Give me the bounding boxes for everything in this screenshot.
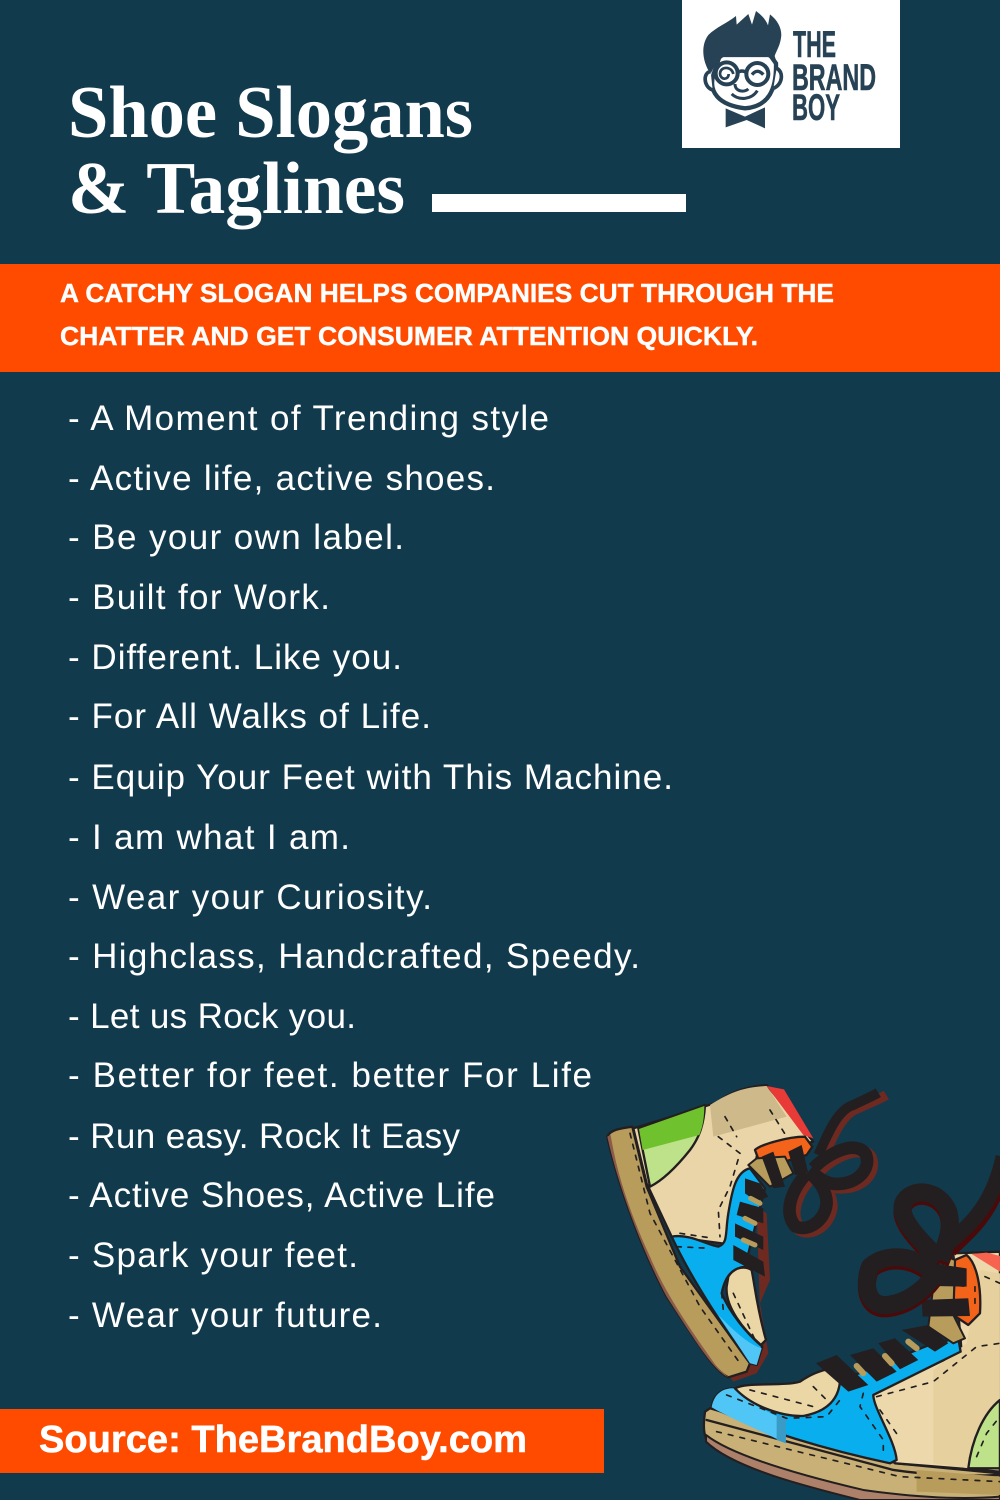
left sneaker xyxy=(607,1085,813,1382)
slogan list: - Active life, active shoes. xyxy=(68,459,495,498)
slogan list: - Spark your feet. xyxy=(68,1236,358,1275)
title xyxy=(68,72,473,230)
orange banner: A CATCHY SLOGAN HELPS COMPANIES CUT THROUGH THE xyxy=(60,278,834,308)
slogan list: - For All Walks of Life. xyxy=(68,697,431,736)
source footer: Source: TheBrandBoy.com xyxy=(39,1419,527,1461)
right sneaker laces xyxy=(867,1157,1000,1308)
slogan list: - I am what I am. xyxy=(68,818,350,857)
orange banner: CHATTER AND GET CONSUMER ATTENTION QUICKLY. xyxy=(60,321,758,351)
slogan list: - Let us Rock you. xyxy=(68,997,356,1036)
slogan list: - A Moment of Trending style xyxy=(68,399,549,438)
logo wordmark: THE xyxy=(793,24,836,65)
title underline bar xyxy=(432,194,686,212)
slogan list: - Built for Work. xyxy=(68,578,330,617)
left sneaker laces xyxy=(789,1093,886,1231)
title: Shoe Slogans xyxy=(68,72,473,154)
slogan list: - Wear your Curiosity. xyxy=(68,878,432,917)
slogan list: - Different. Like you. xyxy=(68,638,402,677)
icon: boy with glasses xyxy=(703,11,781,128)
illustration: pair of sneakers xyxy=(607,1085,1000,1500)
title: & Taglines xyxy=(68,148,405,230)
source footer xyxy=(0,1409,604,1473)
slogan list: - Active Shoes, Active Life xyxy=(68,1176,495,1215)
logo: The Brand Boy xyxy=(682,0,900,148)
slogan list xyxy=(68,399,673,1335)
slogan list: - Wear your future. xyxy=(68,1296,382,1335)
slogan list: - Better for feet. better For Life xyxy=(68,1056,592,1095)
orange banner xyxy=(0,264,1000,372)
logo wordmark: BOY xyxy=(792,87,840,128)
slogan list: - Equip Your Feet with This Machine. xyxy=(68,758,673,797)
slogan list: - Run easy. Rock It Easy xyxy=(68,1117,460,1156)
slogan list: - Be your own label. xyxy=(68,518,404,557)
slogan list: - Highclass, Handcrafted, Speedy. xyxy=(68,937,640,976)
logo wordmark xyxy=(792,24,876,128)
right sneaker xyxy=(704,1252,1000,1500)
logo wordmark: BRAND xyxy=(792,57,876,98)
